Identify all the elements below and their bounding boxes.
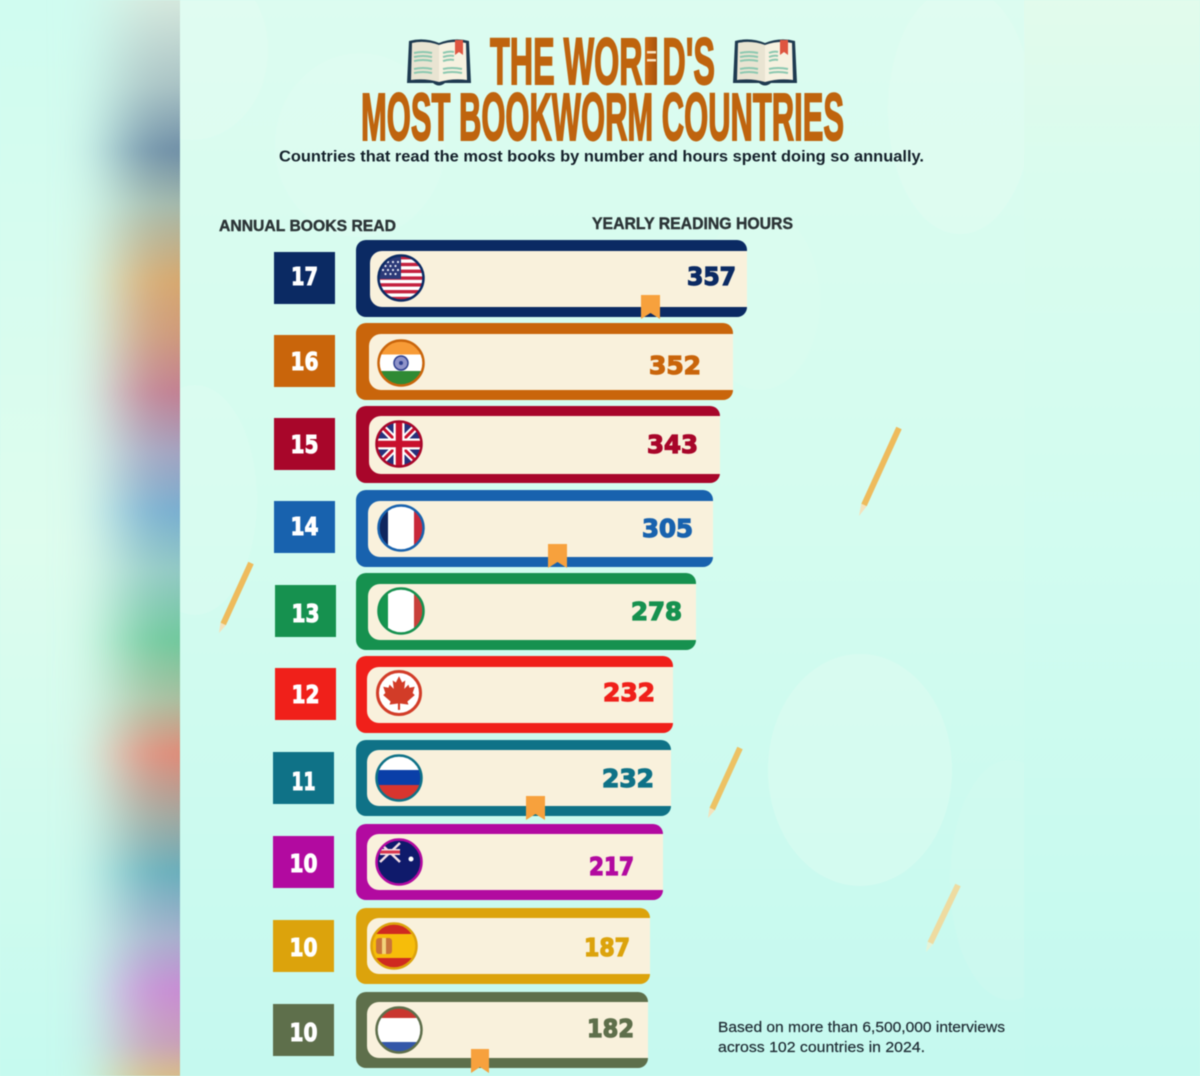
row: Italy bbox=[275, 573, 696, 650]
flag: Russia bbox=[376, 755, 422, 801]
title bbox=[361, 24, 844, 155]
icon: bookmark bbox=[548, 544, 567, 568]
value: 232 hours: 232 bbox=[602, 764, 654, 793]
flag: Spain bbox=[371, 923, 417, 969]
column heading: annual books read: ANNUAL BOOKS READ bbox=[219, 218, 396, 235]
books read: 14: 14 bbox=[290, 512, 318, 541]
icon: bookmark bbox=[471, 1049, 489, 1073]
flag: Netherlands bbox=[376, 1007, 422, 1053]
books read: 11 bbox=[273, 752, 334, 804]
value: 357 hours: 357 bbox=[687, 262, 736, 291]
footnote bbox=[718, 1019, 1005, 1056]
books read: 17 bbox=[274, 252, 335, 304]
books read: 13: 13 bbox=[292, 599, 320, 628]
books read: 16 bbox=[274, 335, 335, 387]
books read: 15 bbox=[274, 418, 335, 470]
value: 217 hours: 217 bbox=[589, 852, 634, 881]
flag: India bbox=[378, 340, 424, 386]
books read: 10 bbox=[273, 920, 334, 972]
flag: Canada bbox=[378, 672, 420, 714]
bar: Russia bbox=[356, 740, 671, 816]
bar: Australia bbox=[356, 824, 663, 900]
flag: Australia bbox=[376, 839, 422, 885]
row: Spain bbox=[273, 908, 650, 984]
icon: pencil left bbox=[219, 562, 254, 633]
icon: open book right bbox=[733, 39, 797, 86]
bar: Italy bbox=[356, 573, 696, 650]
row: Australia bbox=[273, 824, 663, 900]
bar: France bbox=[356, 490, 713, 567]
books read: 17: 17 bbox=[291, 262, 318, 291]
bar: Canada bbox=[356, 656, 673, 733]
flag: United States bbox=[378, 255, 424, 301]
books read: 12 bbox=[275, 668, 336, 720]
column heading: yearly reading hours: YEARLY READING HOURS bbox=[592, 215, 793, 233]
blurred left backdrop bbox=[76, 0, 181, 1076]
row: Netherlands bbox=[273, 992, 648, 1073]
bar: United Kingdom bbox=[356, 406, 720, 483]
bar: United States bbox=[356, 240, 747, 317]
books read: 10 bbox=[273, 1004, 334, 1056]
books read: 11: 11 bbox=[292, 767, 316, 796]
value: 305 hours: 305 bbox=[642, 514, 693, 543]
icon: pencil upper right bbox=[859, 427, 902, 516]
subtitle: Countries that read the most books by number and hours spent doing so annually. bbox=[279, 148, 924, 166]
value: 187 hours: 187 bbox=[584, 933, 630, 962]
row: Canada bbox=[275, 656, 673, 733]
bar: Spain bbox=[356, 908, 650, 984]
footnote line 1: Based on more than 6,500,000 interviews bbox=[718, 1019, 1005, 1036]
flag: Italy bbox=[378, 588, 424, 634]
books read: 10: 10 bbox=[290, 933, 318, 962]
books read: 10: 10 bbox=[290, 1018, 318, 1047]
blurred right backdrop bbox=[1024, 0, 1200, 1076]
books read: 15: 15 bbox=[290, 430, 318, 459]
value: 343 hours: 343 bbox=[647, 430, 698, 459]
books read: 12: 12 bbox=[292, 680, 320, 709]
row: United Kingdom bbox=[274, 406, 720, 483]
books read: 14 bbox=[274, 501, 335, 553]
bar: Netherlands bbox=[356, 992, 648, 1068]
books read: 10 bbox=[273, 836, 334, 888]
icon: open book left bbox=[407, 39, 471, 86]
books read: 16: 16 bbox=[290, 347, 318, 376]
icon: pencil lower right bbox=[926, 884, 961, 952]
books read: 10: 10 bbox=[290, 849, 318, 878]
footnote line 2: across 102 countries in 2024. bbox=[718, 1039, 925, 1056]
panel background bubbles bbox=[769, 694, 951, 886]
value: 182 hours: 182 bbox=[587, 1014, 634, 1043]
title line 1: THE WORLD'S bbox=[490, 24, 715, 98]
value: 352 hours: 352 bbox=[649, 351, 701, 380]
icon: bookmark bbox=[526, 796, 545, 820]
icon: book spine in title bbox=[645, 37, 657, 85]
flag: United Kingdom bbox=[376, 421, 422, 467]
value: 232 hours: 232 bbox=[603, 678, 655, 707]
value: 278 hours: 278 bbox=[631, 597, 682, 626]
icon: pencil centre bbox=[708, 747, 743, 818]
row: India bbox=[274, 323, 733, 400]
row: Russia bbox=[273, 740, 671, 820]
flag: France bbox=[378, 505, 424, 551]
books read: 13 bbox=[275, 585, 336, 637]
row: France bbox=[274, 490, 713, 568]
icon: bookmark bbox=[641, 295, 660, 319]
bar: India bbox=[356, 323, 733, 400]
row: United States bbox=[274, 240, 747, 319]
central panel bbox=[180, 0, 1024, 1076]
